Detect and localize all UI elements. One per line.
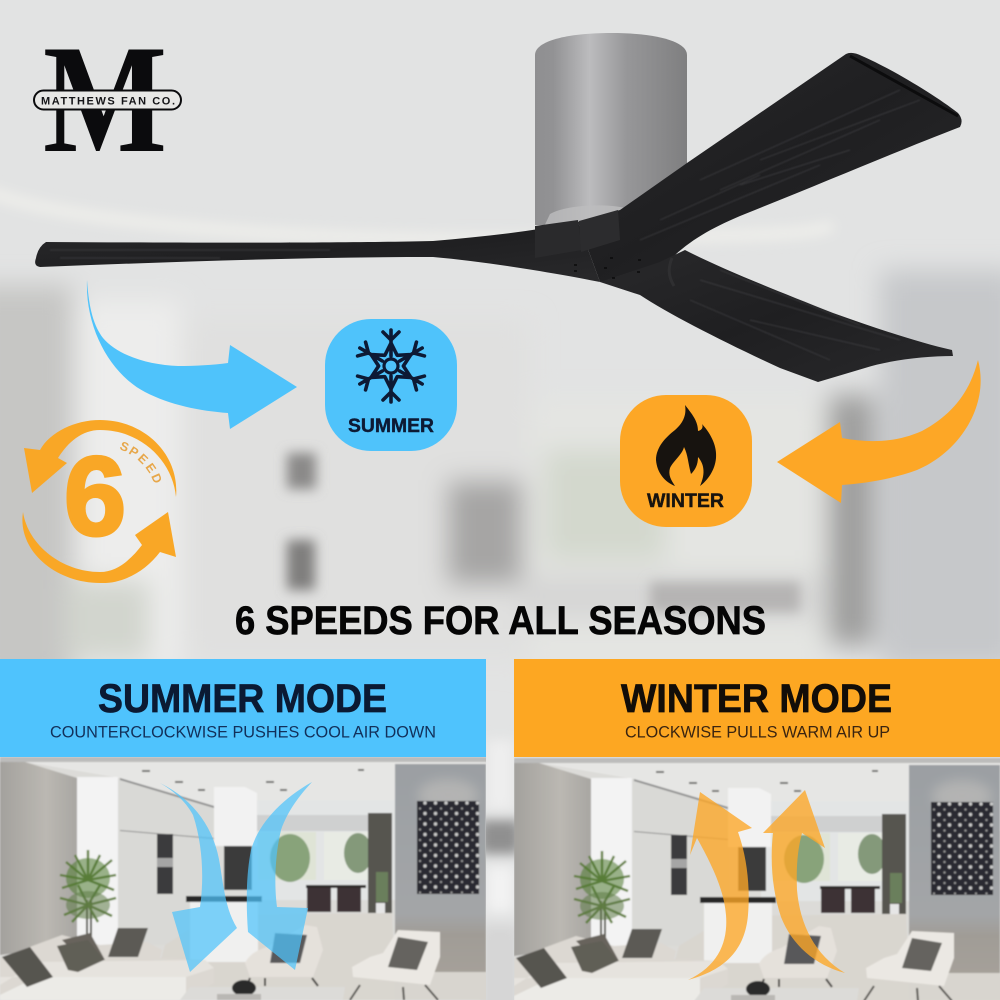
label: speed: E — [135, 451, 151, 467]
label: speed — [118, 439, 165, 485]
arrow: cool air down right — [247, 782, 312, 970]
panel: winter mode — [514, 659, 1000, 757]
fan blade: upper right — [578, 53, 962, 282]
photo: winter room with airflow — [514, 758, 1000, 1000]
ceiling fan — [35, 33, 962, 382]
icon: flame — [656, 405, 716, 486]
arrow: warm air up left — [688, 792, 752, 980]
lower rotation arrow — [22, 512, 176, 583]
heading: winter mode: WINTER MODE — [621, 677, 892, 721]
arrow: winter airflow to badge — [777, 360, 981, 503]
label: winter: WINTER — [647, 491, 724, 512]
fan blade: left — [35, 222, 600, 282]
label: speed: P — [126, 444, 141, 460]
label: speed: S — [118, 439, 131, 455]
heading: summer mode: SUMMER MODE — [98, 677, 387, 721]
panel: summer mode — [0, 659, 486, 757]
numeral 6: 6 — [64, 434, 126, 559]
logo: Matthews Fan Co.: M — [43, 13, 167, 185]
arrow: summer airflow to badge — [87, 280, 297, 429]
subheading: summer: COUNTERCLOCKWISE PUSHES COOL AIR DOWN — [50, 722, 436, 742]
arrow: cool air down left — [160, 783, 237, 972]
label: summer: SUMMER — [348, 416, 434, 437]
fan motor housing — [535, 33, 687, 235]
icon: 6 speed — [22, 420, 176, 583]
logo: Matthews Fan Co.: MATTHEWS FAN CO. — [41, 96, 175, 108]
title: 6 SPEEDS FOR ALL SEASONS — [235, 599, 766, 643]
photo: summer room with airflow — [0, 757, 490, 1000]
badge: winter — [620, 395, 752, 527]
label: speed: D — [148, 472, 165, 485]
fan blade: lower right — [600, 250, 953, 382]
badge: summer — [325, 319, 457, 451]
upper rotation arrow — [24, 420, 176, 497]
icon: snowflake — [356, 330, 426, 402]
fan hub and grain — [50, 56, 958, 360]
subheading: winter: CLOCKWISE PULLS WARM AIR UP — [625, 722, 890, 742]
arrow: warm air up right — [763, 790, 845, 973]
label: speed: E — [143, 461, 159, 476]
